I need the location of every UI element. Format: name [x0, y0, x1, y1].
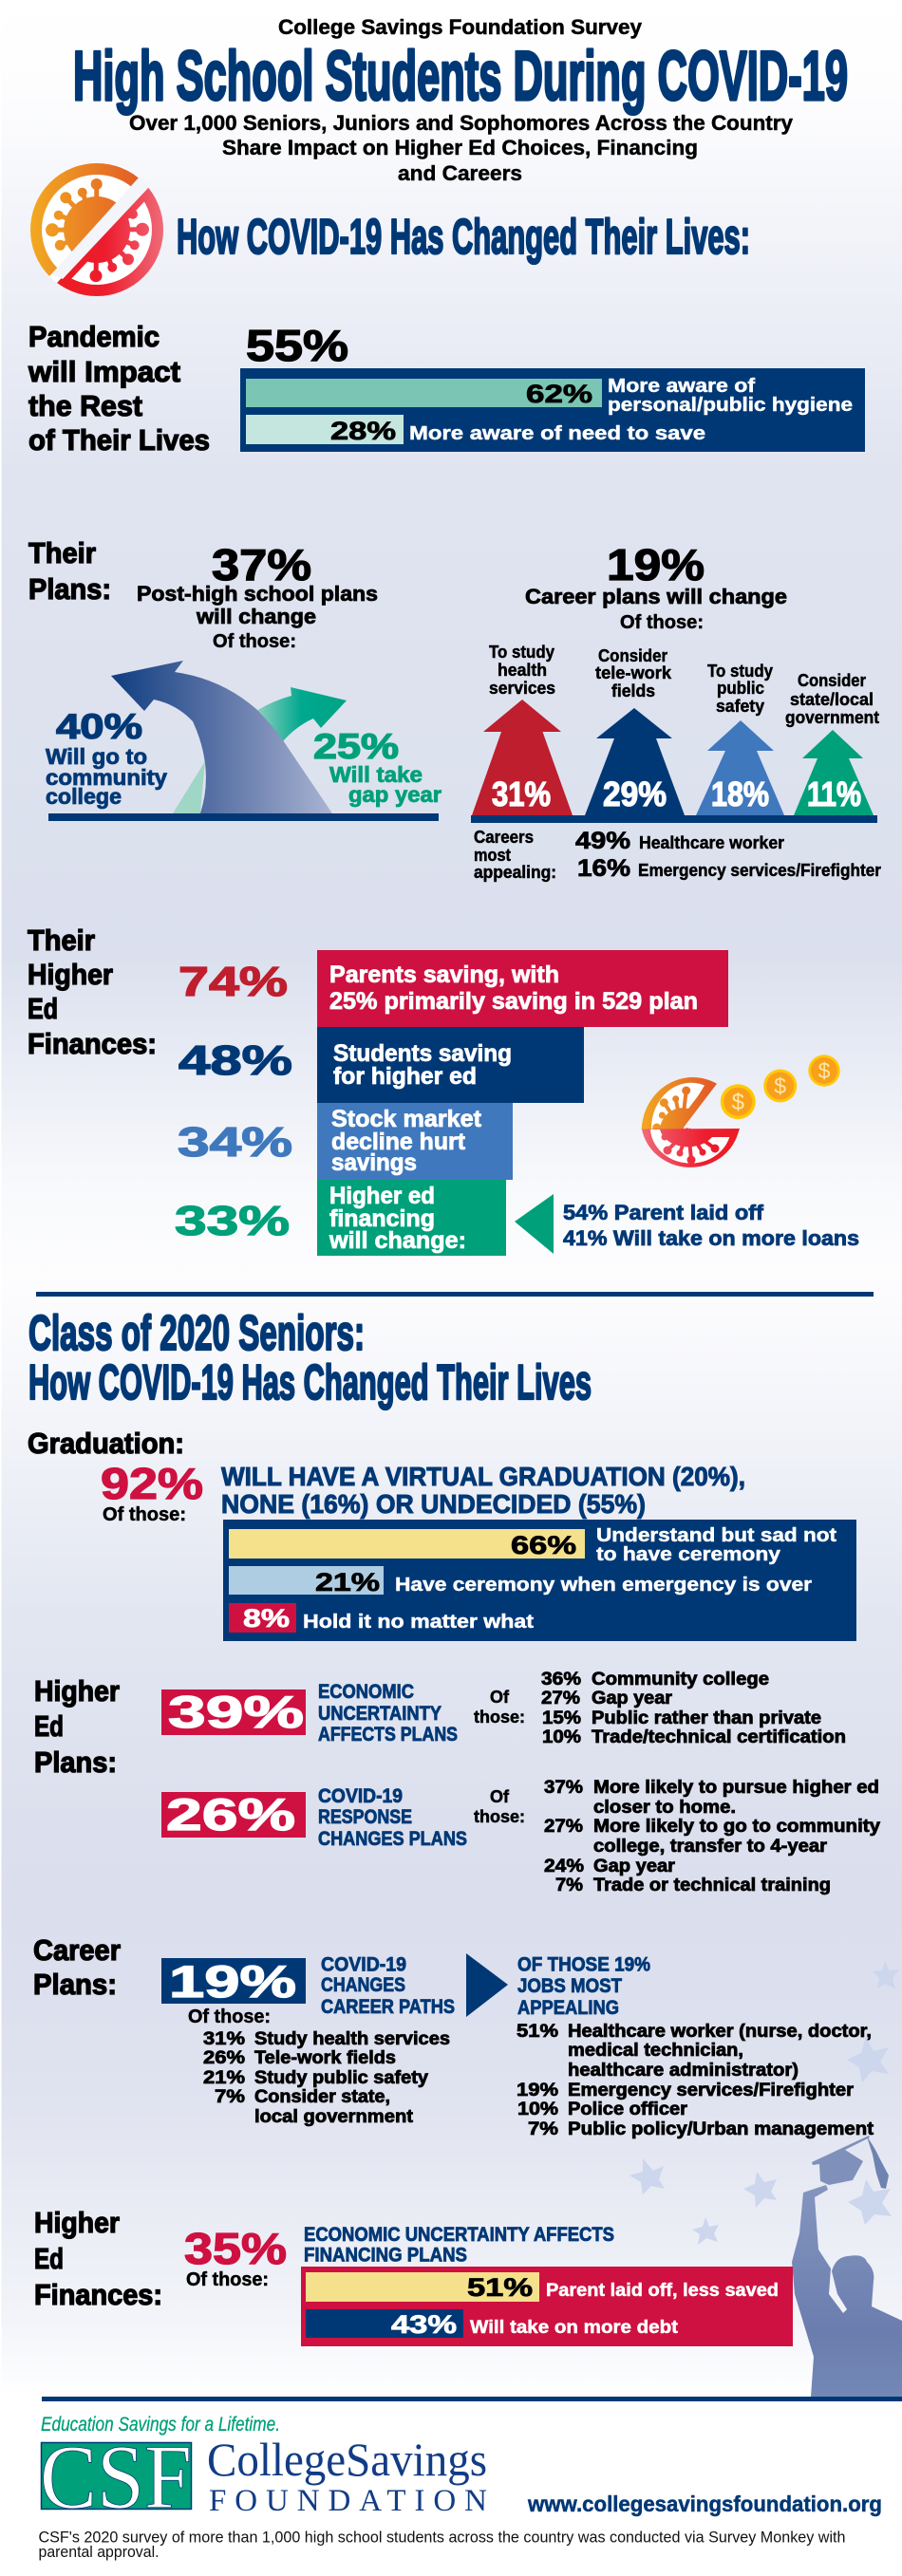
- label: their plans: Plans:: [28, 572, 111, 606]
- bar: 51%: [306, 2272, 779, 2302]
- arrow: to jobs most appealing: [466, 1953, 508, 2017]
- panel: 19% career paths: CHANGES: [321, 1974, 405, 1996]
- label: higher ed plans: Higher: [34, 1674, 120, 1708]
- arrow: 31% health services: To study: [489, 643, 554, 662]
- arrow: 11% government: 11%: [807, 775, 861, 813]
- callout: laid off and loans: 54% Parent laid off: [563, 1201, 764, 1224]
- label: their plans: Their: [28, 536, 96, 569]
- arrow: 31% health services: services: [489, 679, 555, 698]
- panel: jobs most appealing: 7%: [528, 2119, 558, 2139]
- panel: 26% covid response: 24%: [544, 1857, 584, 1876]
- stat: 25% gap year: Will take: [329, 762, 423, 787]
- coin 3: $: [818, 1058, 831, 1083]
- CSF monogram: CSF: [40, 2426, 192, 2528]
- panel: 19% career paths: Consider state,: [254, 2087, 390, 2107]
- panel: jobs most appealing: Emergency services/Firefighter: [568, 2081, 855, 2100]
- panel: 19% career paths: 19%: [169, 1956, 296, 2007]
- label: graduation: Graduation:: [28, 1427, 184, 1460]
- stat: 40% community college: community: [46, 765, 167, 790]
- arrow: 31% health services: health: [498, 661, 547, 680]
- bar: 43%: [306, 2309, 679, 2339]
- bar: 51%: Parent laid off, less saved: [546, 2281, 779, 2301]
- label: pandemic will impact: of Their Lives: [28, 423, 210, 457]
- panel: jobs most appealing: medical technician,: [568, 2041, 743, 2061]
- label: higher ed finances: [28, 924, 157, 1060]
- stat: 40% community college: 40%: [56, 707, 142, 746]
- icon: virus eating coins: [642, 1055, 840, 1167]
- arrow: 31% health services: 31%: [492, 775, 551, 813]
- bar: 62% hygiene: personal/public hygiene: [608, 395, 853, 416]
- panel: 39% economic uncertainty: 15%: [542, 1708, 581, 1728]
- panel: 19% career paths: 26%: [203, 2048, 245, 2068]
- panel: 39% economic uncertainty: 27%: [541, 1689, 580, 1708]
- arrow: 29% tele-work: tele-work: [595, 663, 672, 682]
- bar: 21%: 21%: [315, 1568, 380, 1596]
- arrow: 29% tele-work: fields: [611, 681, 655, 700]
- panel: 39% economic uncertainty: Trade/technical certification: [592, 1727, 846, 1747]
- wordmark: CollegeSavings: [207, 2433, 487, 2486]
- panel: 39% economic uncertainty: ECONOMIC: [318, 1681, 414, 1703]
- arrow: 29% tele-work: Consider: [598, 646, 667, 665]
- panel: 39% economic uncertainty: those:: [474, 1708, 525, 1727]
- panel: jobs most appealing: Public policy/Urban management: [568, 2119, 874, 2139]
- bar: 28% save: More aware of need to save: [409, 423, 705, 444]
- row: 34% stock market: 34%: [178, 1119, 292, 1166]
- stat: 37% post-high school plans: [137, 540, 378, 652]
- row: 74% parents saving: [179, 950, 728, 1027]
- panel: 19% career paths: 31%: [203, 2029, 245, 2049]
- careers most appealing: [474, 828, 881, 882]
- panel: 26% covid response: More likely to pursue higher ed: [593, 1778, 879, 1798]
- stat: 19% career plans: Career plans will change: [525, 585, 787, 608]
- arrow: 11% government: Consider: [798, 671, 866, 690]
- panel: 19% career paths: Of those:: [188, 2007, 271, 2027]
- panel: 26% covid response: closer to home.: [593, 1798, 736, 1818]
- virus pacman bottom: [642, 1129, 740, 1167]
- panel: 26% covid response: 26%: [166, 1789, 295, 1839]
- heading: virtual graduation: [221, 1462, 745, 1519]
- panel: 39% economic uncertainty: 39%: [168, 1687, 304, 1737]
- panel: financing bars: [301, 2267, 793, 2346]
- row: 33% financing will change: Higher ed: [329, 1183, 435, 1209]
- panel: 26% covid response: [161, 1778, 880, 1895]
- panel: 39% economic uncertainty: UNCERTAINTY: [318, 1703, 442, 1725]
- stat: 37% post-high school plans: will change: [196, 605, 316, 628]
- label: higher ed plans: [34, 1674, 120, 1779]
- panel: 19% career paths: Tele-work fields: [254, 2048, 396, 2068]
- label: pandemic will impact: will Impact: [28, 355, 180, 388]
- website url: www.collegesavingsfoundation.org: [527, 2492, 882, 2516]
- label: higher ed finances, seniors: [34, 2206, 162, 2311]
- heading: economic uncertainty financing: FINANCING PLANS: [304, 2244, 467, 2267]
- stat: 55%: 55%: [246, 321, 348, 370]
- panel: 19% career paths: CAREER PATHS: [321, 1996, 455, 2018]
- heading: virtual graduation: WILL HAVE A VIRTUAL GRADUATION (20%),: [221, 1462, 745, 1491]
- panel: jobs most appealing: JOBS MOST: [517, 1975, 622, 1997]
- panel: 26% covid response: 7%: [555, 1876, 583, 1895]
- label: higher ed finances, seniors: Higher: [34, 2206, 120, 2239]
- stat: 19% career plans: Of those:: [620, 612, 704, 633]
- bar: 66%: to have ceremony: [596, 1544, 781, 1565]
- footnote: CSF's 2020 survey of more than 1,000 high school students across the country was conducted via Survey Monkey with: [38, 2529, 845, 2546]
- graduation cap: [812, 2136, 870, 2185]
- stat: 40% community college: Will go to: [46, 744, 147, 769]
- panel: jobs most appealing: 51%: [517, 2022, 558, 2042]
- stat: 92%: 92%: [101, 1459, 203, 1508]
- stat: 35%: [184, 2224, 287, 2290]
- panel: 26% covid response: Gap year: [593, 1857, 676, 1876]
- label: higher ed plans: Plans:: [34, 1745, 117, 1779]
- coin 2: $: [774, 1073, 786, 1098]
- label: pandemic will impact: Pandemic: [28, 320, 160, 353]
- arrow: 18% public safety: safety: [716, 697, 764, 716]
- careers most appealing: Healthcare worker: [639, 833, 784, 852]
- bar: 8%: [229, 1603, 534, 1633]
- panel: 19% career paths: COVID-19: [321, 1953, 406, 1976]
- stat: 92%: Of those:: [103, 1504, 186, 1525]
- label: higher ed finances: Finances:: [28, 1027, 157, 1060]
- section heading: class of 2020: [28, 1306, 592, 1410]
- row: 48% students saving: for higher ed: [333, 1063, 477, 1090]
- arrow: 18% public safety: To study: [707, 662, 773, 681]
- label: higher ed finances: Their: [28, 924, 95, 957]
- arrow: 11% government: government: [785, 708, 879, 727]
- bar: 8%: 8%: [243, 1604, 290, 1633]
- arrow: gap year: [256, 687, 347, 741]
- virus pacman top: [642, 1077, 717, 1131]
- bar: 21%: Have ceremony when emergency is over: [395, 1575, 812, 1596]
- careers most appealing: Careers: [474, 828, 534, 847]
- section heading: class of 2020: Class of 2020 Seniors:: [28, 1306, 365, 1361]
- wordmark: [207, 2433, 487, 2518]
- panel: jobs most appealing: [517, 1953, 874, 2139]
- subtitle: [129, 111, 794, 185]
- panel: 39% economic uncertainty: Of: [490, 1688, 510, 1707]
- row: 74% parents saving: 25% primarily saving in 529 plan: [329, 988, 698, 1015]
- panel: 19% career paths: Study public safety: [254, 2068, 428, 2088]
- panel: 26% covid response: RESPONSE: [318, 1806, 412, 1828]
- arrow: 11% government: state/local: [790, 690, 874, 709]
- label: career plans: [33, 1933, 121, 2001]
- row: 34% stock market: savings: [331, 1149, 417, 1176]
- row: 74% parents saving: Parents saving, with: [329, 961, 559, 988]
- panel: 39% economic uncertainty: 36%: [541, 1670, 581, 1689]
- decorative stars and graduate: [630, 1961, 902, 2397]
- careers most appealing: 49%: [575, 828, 630, 854]
- panel: jobs most appealing: Police officer: [568, 2100, 688, 2119]
- panel: 19% career paths: 7%: [215, 2087, 245, 2107]
- icon: crossed-out virus: [30, 163, 163, 296]
- panel: 26% covid response: Trade or technical training: [593, 1876, 831, 1895]
- callout: laid off and loans: 41% Will take on more loans: [563, 1226, 859, 1250]
- panel: 26% covid response: those:: [474, 1807, 525, 1826]
- callout: laid off and loans: [563, 1201, 859, 1250]
- panel: 19% career paths: local government: [254, 2107, 414, 2127]
- label: higher ed finances: Ed: [28, 992, 58, 1025]
- bar: 62% hygiene: [246, 376, 853, 416]
- panel: 26% covid response: 37%: [544, 1778, 583, 1798]
- label: career plans: Career: [33, 1933, 121, 1967]
- bar: 28% save: [246, 415, 705, 445]
- panel: 19% career paths: 21%: [203, 2068, 245, 2088]
- bar: 66%: 66%: [511, 1531, 576, 1559]
- stat: 19% career plans: [525, 540, 787, 633]
- panel: jobs most appealing: 19%: [517, 2081, 558, 2100]
- chart: savings staircase: [175, 950, 728, 1256]
- arrow: 11% government: [785, 671, 879, 815]
- panel: awareness bars: [240, 368, 865, 452]
- stat: 35%: 35%: [184, 2224, 287, 2273]
- row: 74% parents saving: 74%: [179, 959, 288, 1005]
- bar: 66%: [229, 1525, 836, 1565]
- panel: 26% covid response: college, transfer to 4-year: [593, 1837, 828, 1857]
- careers most appealing: Emergency services/Firefighter: [638, 861, 881, 880]
- panel: jobs most appealing: APPEALING: [517, 1997, 619, 2019]
- row: 33% financing will change: financing: [329, 1205, 435, 1232]
- heading: economic uncertainty financing: [304, 2224, 614, 2267]
- row: 33% financing will change: 33%: [175, 1198, 290, 1244]
- arrow: community college: [111, 661, 332, 813]
- footer logo block: [40, 2414, 487, 2528]
- arrow: 18% public safety: 18%: [711, 775, 769, 813]
- row: 34% stock market: decline hurt: [331, 1129, 466, 1155]
- row: 48% students saving: [179, 1027, 584, 1103]
- panel: ceremony bars: [223, 1520, 856, 1641]
- tassel: [867, 2137, 889, 2189]
- bar: 62% hygiene: More aware of: [608, 376, 755, 397]
- panel: 26% covid response: COVID-19: [318, 1785, 403, 1807]
- row: 34% stock market: Stock market: [331, 1106, 482, 1132]
- panel: 26% covid response: More likely to go to community: [593, 1817, 880, 1837]
- label: pandemic will impact: [28, 320, 210, 457]
- panel: 26% covid response: 27%: [544, 1817, 583, 1837]
- careers most appealing: appealing:: [474, 863, 556, 882]
- footnote: [38, 2529, 845, 2561]
- stat: 35%: Of those:: [186, 2269, 269, 2290]
- panel: 19% career paths: [161, 1953, 455, 2127]
- bar: 28% save: 28%: [330, 417, 396, 445]
- bar: 43%: Will take on more debt: [470, 2318, 679, 2338]
- chart: career arrows: [471, 643, 879, 823]
- panel: 39% economic uncertainty: Community college: [592, 1670, 769, 1689]
- label: higher ed finances, seniors: Ed: [34, 2242, 64, 2275]
- arrow: 31% health services: [472, 643, 573, 815]
- panel: jobs most appealing: OF THOSE 19%: [517, 1953, 650, 1976]
- arrow: 18% public safety: public: [717, 679, 764, 698]
- panel: 39% economic uncertainty: 10%: [542, 1727, 581, 1747]
- footnote: parental approval.: [38, 2543, 160, 2561]
- panel: 39% economic uncertainty: [161, 1670, 846, 1747]
- bar: 66%: Understand but sad not: [596, 1525, 836, 1546]
- bar: 8%: Hold it no matter what: [303, 1612, 534, 1633]
- stat: 25% gap year: 25%: [313, 727, 399, 766]
- panel: jobs most appealing: healthcare administrator): [568, 2061, 799, 2081]
- stat: 25% gap year: gap year: [348, 782, 442, 807]
- heading: economic uncertainty financing: ECONOMIC UNCERTAINTY AFFECTS: [304, 2224, 614, 2246]
- arrow: pointing to financing row: [515, 1194, 554, 1254]
- coin 1: [721, 1084, 756, 1119]
- graduate silhouette: [792, 2185, 902, 2397]
- header: [73, 15, 848, 185]
- row: 48% students saving: 48%: [179, 1037, 292, 1084]
- tagline: Education Savings for a Lifetime.: [41, 2414, 280, 2436]
- stat: 37% post-high school plans: Post-high school plans: [137, 582, 378, 606]
- stat: 25% gap year: [313, 727, 442, 807]
- label: their plans: [28, 536, 111, 606]
- panel: 39% economic uncertainty: Public rather than private: [592, 1708, 821, 1728]
- label: higher ed finances: Higher: [28, 958, 113, 991]
- panel: jobs most appealing: 10%: [517, 2100, 558, 2119]
- bar: 21%: [229, 1566, 812, 1596]
- bar: 62% hygiene: 62%: [526, 380, 592, 408]
- wordmark: FOUNDATION: [209, 2484, 487, 2518]
- stat: 40% community college: [46, 707, 167, 809]
- stars: [630, 1961, 899, 2245]
- arrow: 29% tele-work: 29%: [603, 775, 667, 813]
- stat: 40% community college: college: [46, 784, 122, 809]
- panel: 26% covid response: CHANGES PLANS: [318, 1828, 467, 1850]
- heading: virtual graduation: NONE (16%) OR UNDECIDED (55%): [221, 1489, 646, 1519]
- coin 2: [763, 1069, 797, 1103]
- panel: 39% economic uncertainty: AFFECTS PLANS: [318, 1724, 458, 1745]
- arrow: 29% tele-work: [585, 646, 685, 815]
- chart: diverging arrows: [46, 661, 442, 821]
- row: 34% stock market: [178, 1103, 513, 1180]
- stat: 19% career plans: 19%: [607, 540, 705, 589]
- stat: 37% post-high school plans: Of those:: [213, 631, 296, 652]
- panel: jobs most appealing: Healthcare worker (nurse, doctor,: [568, 2022, 872, 2042]
- subtitle: Share Impact on Higher Ed Choices, Financing: [222, 136, 698, 159]
- label: higher ed finances, seniors: Finances:: [34, 2278, 162, 2311]
- stat: 92%: [101, 1459, 203, 1525]
- panel: 26% covid response: Of: [490, 1787, 510, 1806]
- stat: 37% post-high school plans: 37%: [212, 540, 311, 589]
- label: higher ed plans: Ed: [34, 1709, 64, 1743]
- bar: 51%: 51%: [467, 2273, 533, 2302]
- coin 3: [808, 1055, 840, 1087]
- panel: 39% economic uncertainty: Gap year: [592, 1689, 673, 1708]
- label: career plans: Plans:: [33, 1968, 117, 2001]
- careers most appealing: 16%: [577, 855, 630, 882]
- row: 33% financing will change: [175, 1180, 506, 1256]
- subtitle: and Careers: [398, 161, 522, 185]
- coin 1: $: [732, 1090, 744, 1115]
- arrow: 18% public safety: [696, 662, 784, 815]
- row: 48% students saving: Students saving: [333, 1040, 512, 1067]
- careers most appealing: most: [474, 846, 511, 865]
- survey kicker: College Savings Foundation Survey: [278, 15, 643, 39]
- bar: 43%: 43%: [391, 2310, 457, 2339]
- label: pandemic will impact: the Rest: [28, 389, 142, 422]
- panel: 19% career paths: Study health services: [254, 2029, 450, 2049]
- row: 33% financing will change: will change:: [329, 1227, 466, 1254]
- subtitle: Over 1,000 Seniors, Juniors and Sophomores Across the Country: [129, 111, 794, 135]
